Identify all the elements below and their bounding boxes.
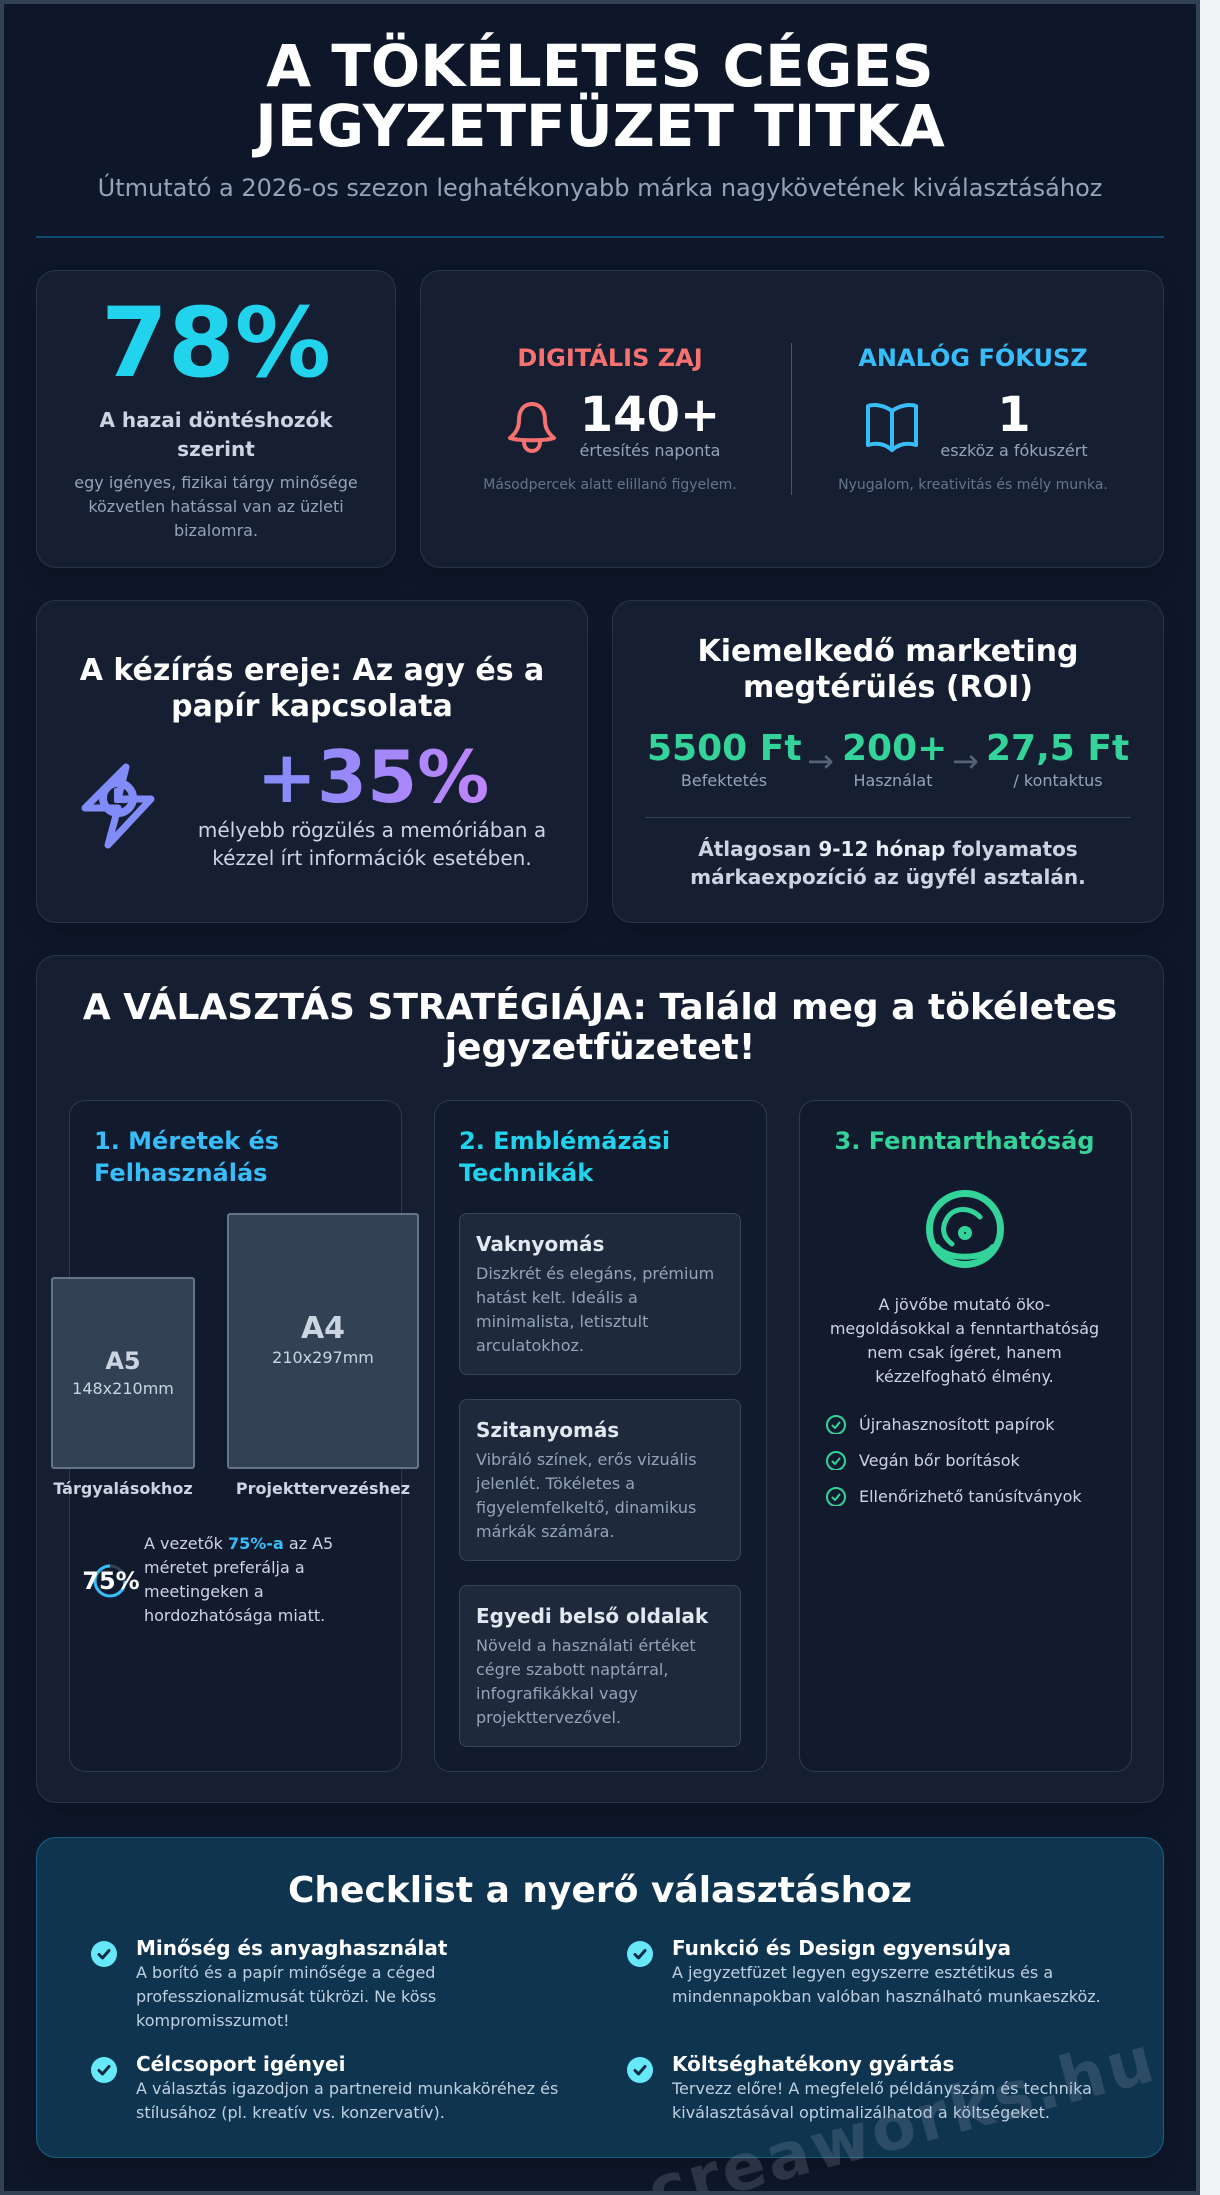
item title: Költséghatékony gyártás (672, 2052, 954, 2076)
number: 140+: 140+ (580, 387, 720, 443)
item: function and design (627, 1936, 1101, 2006)
item text: A jegyzetfüzet legyen egyszerre esztétikus és a (672, 1963, 1053, 1982)
icon: open book (866, 403, 918, 452)
panel: checklist (36, 1837, 1164, 2158)
panel: marketing ROI (612, 600, 1164, 923)
label: notifications: értesítés naponta (580, 441, 720, 460)
label: usage: Használat (853, 771, 933, 790)
item title: Célcsoport igényei (136, 2052, 345, 2076)
preference text: A vezetők 75%-a az A5 (144, 1534, 333, 1553)
column heading: Felhasználás (94, 1159, 267, 1187)
icon: bell (508, 402, 556, 453)
preference text: méretet preferálja a (144, 1558, 305, 1577)
item text (136, 2079, 558, 2122)
check icon (826, 1451, 846, 1470)
list item (826, 1414, 1054, 1434)
item text: Vegán bőr borítások (859, 1451, 1020, 1470)
statistic description: közvetlen hatással van az üzleti (88, 497, 344, 516)
A4 usage label: Projekttervezéshez (236, 1479, 410, 1498)
heading: A kézírás ereje: Az agy és a (80, 653, 544, 688)
card text: projekttervezővel. (476, 1708, 621, 1727)
preference text (144, 1534, 333, 1625)
statistic heading: A hazai döntéshozók (99, 408, 333, 432)
card: debossing (459, 1213, 741, 1375)
card title: Egyedi belső oldalak (476, 1604, 708, 1628)
card text: infografikákkal vagy (476, 1684, 638, 1703)
heading: analog focus: ANALÓG FÓKUSZ (858, 344, 1088, 372)
column heading (94, 1127, 279, 1187)
item: target audience (91, 2052, 558, 2122)
heading: A VÁLASZTÁS STRATÉGIÁJA: Találd meg a tökéletes (83, 987, 1117, 1028)
card text: arculatokhoz. (476, 1336, 584, 1355)
column heading: 3. Fenntarthatóság (835, 1127, 1094, 1155)
heading (80, 653, 544, 724)
heading: Kiemelkedő marketing (697, 634, 1079, 669)
item text: kompromisszumot! (136, 2011, 290, 2030)
A5 dimensions: 148x210mm (72, 1379, 174, 1398)
heading: jegyzetfüzetet! (445, 1027, 755, 1068)
divider (791, 343, 792, 495)
item: cost effective production (627, 2052, 1092, 2122)
preference text: hordozhatósága miatt. (144, 1606, 325, 1625)
item text: stílusához (pl. kreatív vs. konzervatív). (136, 2103, 445, 2122)
card text: hatást kelt. Ideális a (476, 1288, 638, 1307)
heading (83, 986, 1117, 1068)
description: mélyebb rögzülés a memóriában a (198, 818, 546, 842)
card: screen printing (459, 1399, 741, 1561)
summary text (690, 837, 1086, 889)
column heading (459, 1127, 670, 1187)
A4 label: A4 (301, 1311, 345, 1346)
label: one tool: eszköz a fókuszért (940, 441, 1088, 460)
column 1: sizes and use (69, 1100, 402, 1772)
donut value: 75% (82, 1567, 140, 1595)
A5 usage label: Tárgyalásokhoz (53, 1479, 193, 1498)
icon: lightning bolt (82, 764, 154, 848)
arrow: → (952, 742, 979, 780)
card text: minimalista, letisztult (476, 1312, 648, 1331)
heading: papír kapcsolata (171, 689, 453, 724)
arrow: → (807, 742, 834, 780)
description: kézzelfogható élmény. (875, 1367, 1054, 1386)
big number: 78% (101, 287, 331, 399)
description: kézzel írt információk esetében. (212, 846, 532, 870)
heading (697, 634, 1079, 705)
check icon (627, 2057, 653, 2083)
card text: jelenlét. Tökéletes a (476, 1474, 635, 1493)
card text (476, 1636, 696, 1727)
item text: Ellenőrizhető tanúsítványok (859, 1487, 1082, 1506)
item text (672, 1963, 1101, 2006)
value: usage: 200+ (842, 728, 947, 769)
number: 1: 1 (997, 387, 1031, 443)
item: quality (91, 1936, 447, 2030)
card text (476, 1450, 697, 1541)
check icon (91, 1941, 117, 1967)
list item (826, 1487, 1082, 1506)
card text: Vibráló színek, erős vizuális (476, 1450, 697, 1469)
column heading: Technikák (459, 1159, 593, 1187)
A4 sheet (227, 1213, 419, 1469)
item text (672, 2079, 1092, 2122)
check icon (91, 2057, 117, 2083)
description: megoldásokkal a fenntarthatóság (830, 1319, 1099, 1338)
check icon (826, 1487, 846, 1506)
subtitle: Útmutató a 2026-os szezon leghatékonyabb márka nagykövetének kiválasztásához (98, 174, 1102, 202)
description: nem csak ígéret, hanem (867, 1343, 1062, 1362)
statistic description (74, 473, 358, 540)
column 2: branding techniques (434, 1100, 767, 1772)
check icon (826, 1415, 846, 1434)
item text: A választás igazodjon a partnereid munkaköréhez és (136, 2079, 558, 2098)
item title: Funkció és Design egyensúlya (672, 1936, 1011, 1960)
panel: power of handwriting (36, 600, 588, 923)
card: custom inner pages (459, 1585, 741, 1747)
A5 sheet (51, 1277, 195, 1469)
description (830, 1295, 1099, 1386)
checklist heading: Checklist a nyerő választáshoz (288, 1870, 912, 1911)
statistic description: bizalomra. (174, 521, 258, 540)
list item (826, 1451, 1020, 1470)
column heading: 2. Emblémázási (459, 1127, 670, 1155)
card text: cégre szabott naptárral, (476, 1660, 668, 1679)
preference text: meetingeken a (144, 1582, 264, 1601)
title: JEGYZETFÜZET TITKA (255, 92, 945, 160)
card text (476, 1264, 714, 1355)
header (98, 32, 1102, 202)
description: A jövőbe mutató öko- (879, 1295, 1050, 1314)
value: investment: 5500 Ft (647, 728, 802, 769)
item text: kiválasztásával optimalizálhatod a költségeket. (672, 2103, 1050, 2122)
panel: 78% statistic (36, 270, 396, 568)
label: investment: Befektetés (681, 771, 767, 790)
A4 dimensions: 210x297mm (272, 1348, 374, 1367)
card text: márkák számára. (476, 1522, 615, 1541)
donut chart: 75% (94, 1564, 126, 1598)
description (198, 818, 546, 870)
card title: Szitanyomás (476, 1418, 619, 1442)
item text: Újrahasznosított papírok (859, 1415, 1054, 1434)
item text: professzionalizmusát tükrözi. Ne köss (136, 1987, 436, 2006)
card text: Diszkrét és elegáns, prémium (476, 1264, 714, 1283)
column 3: sustainability (799, 1100, 1132, 1772)
statistic heading: szerint (177, 437, 255, 461)
title: A TÖKÉLETES CÉGES (266, 32, 934, 100)
heading: megtérülés (ROI) (743, 670, 1033, 705)
item text: A borító és a papír minősége a céged (136, 1963, 435, 1982)
A5 label: A5 (105, 1347, 141, 1375)
column heading: 1. Méretek és (94, 1127, 279, 1155)
statistic description: egy igényes, fizikai tárgy minősége (74, 473, 358, 492)
card title: Vaknyomás (476, 1232, 604, 1256)
item text: Tervezz előre! A megfelelő példányszám és technika (672, 2079, 1092, 2098)
statistic heading (99, 408, 333, 461)
panel: digital noise vs analog focus (420, 270, 1164, 568)
caption: analog: Nyugalom, kreativitás és mély munka. (838, 477, 1108, 493)
label: per contact: / kontaktus (1013, 771, 1103, 790)
summary text: Átlagosan 9-12 hónap folyamatos (698, 837, 1078, 861)
item text (136, 1963, 436, 2030)
caption: digital: Másodpercek alatt elillanó figyelem. (483, 477, 737, 493)
title (252, 32, 945, 160)
summary text: márkaexpozíció az ügyfél asztalán. (690, 865, 1086, 889)
icon: eco ring (926, 1190, 1004, 1268)
value: per contact: 27,5 Ft (986, 728, 1129, 769)
card text: Növeld a használati értéket (476, 1636, 696, 1655)
heading: digital noise: DIGITÁLIS ZAJ (517, 344, 703, 372)
card text: figyelemfelkeltő, dinamikus (476, 1498, 696, 1517)
check icon (627, 1941, 653, 1967)
item text: mindennapokban valóban használható munkaeszköz. (672, 1987, 1101, 2006)
big number: +35% (257, 735, 489, 819)
panel: selection strategy (36, 955, 1164, 1803)
item title: Minőség és anyaghasználat (136, 1936, 447, 1960)
